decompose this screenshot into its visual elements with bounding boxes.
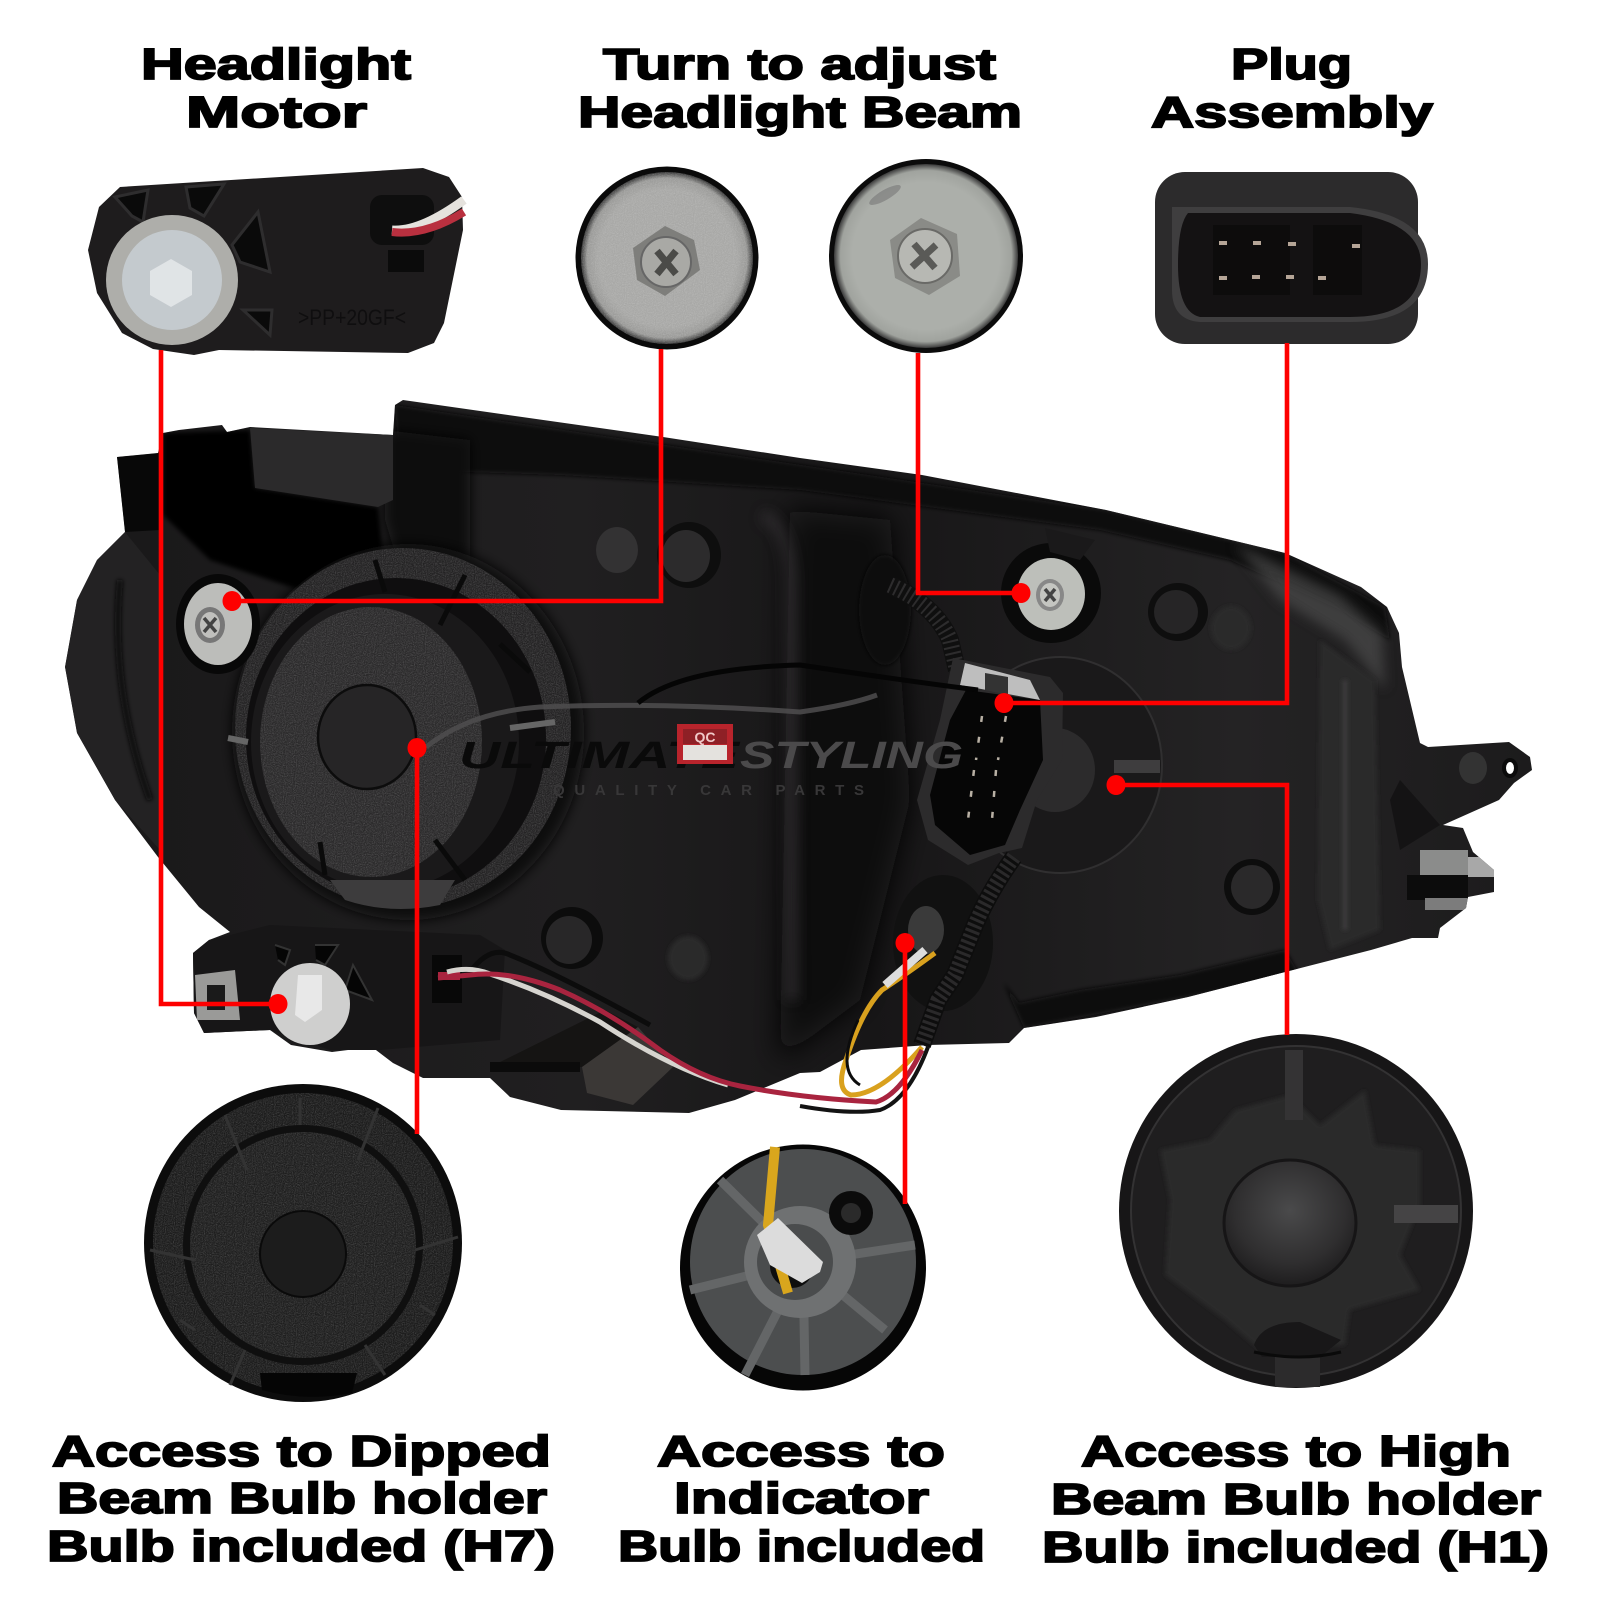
mounting hole	[1504, 760, 1516, 776]
connector line: headlight motor	[161, 350, 288, 1014]
heading: Turn to adjust Headlight Beam: Headlight Beam	[578, 88, 1022, 137]
connector line: high beam	[1106, 775, 1287, 1035]
inset: adjust screw 2	[829, 159, 1023, 353]
flange	[250, 428, 393, 507]
plug pins	[1213, 225, 1362, 295]
connector line: adjust screw right	[918, 353, 1030, 603]
braided wire	[922, 857, 1014, 1045]
heading: Plug Assembly	[1151, 40, 1434, 137]
inset: indicator bulb holder	[680, 1144, 926, 1390]
inset: dipped beam cap	[144, 1084, 462, 1402]
caption: high beam: Beam Bulb holder	[1051, 1475, 1541, 1524]
QC label	[677, 724, 733, 764]
body highlights	[1234, 543, 1385, 690]
heading: Turn to adjust Headlight Beam: Turn to adjust	[603, 40, 996, 89]
heading: Plug Assembly: Assembly	[1151, 88, 1434, 137]
headlight unit	[65, 400, 1532, 1113]
high beam cap on lamp	[958, 657, 1162, 873]
caption: indicator	[618, 1427, 985, 1571]
caption: dipped beam: Beam Bulb holder	[57, 1474, 547, 1523]
connector line: indicator	[896, 933, 914, 1204]
watermark: Ultimate Styling logo: ULTIMATE	[459, 735, 741, 777]
caption: dipped beam: Bulb included (H7)	[47, 1522, 555, 1571]
upper left tab	[117, 453, 160, 532]
lower flange	[1004, 950, 1300, 1028]
adjuster screw right	[1001, 528, 1101, 643]
caption: high beam	[1042, 1427, 1549, 1572]
connector line: plug assembly	[994, 343, 1287, 713]
inset: plug assembly	[1155, 172, 1428, 344]
bumper flap	[490, 1010, 673, 1105]
caption: high beam: Access to High	[1081, 1427, 1511, 1476]
caption: dipped beam: Access to Dipped	[52, 1427, 551, 1476]
motor rib windows	[115, 184, 272, 335]
indicator wire	[757, 1147, 823, 1293]
heading: Plug Assembly: Plug	[1231, 40, 1352, 89]
inset: adjust screw 1	[576, 166, 758, 350]
inset: headlight motor	[88, 168, 464, 355]
connector line: adjust screw left	[222, 349, 661, 611]
right fixture	[1420, 850, 1468, 875]
QC label: QC	[694, 729, 716, 745]
caption: dipped beam	[47, 1427, 555, 1571]
watermark: Ultimate Styling logo: QUALITY CAR PARTS	[553, 782, 864, 799]
caption: indicator: Access to	[657, 1427, 945, 1476]
adjuster screw left	[176, 574, 260, 674]
corrugated wire	[859, 555, 957, 670]
motor connector	[370, 195, 464, 272]
body plugs and grommets	[541, 522, 1280, 980]
watermark: Ultimate Styling logo	[426, 665, 978, 799]
motor on lamp	[193, 925, 505, 1050]
left recess	[163, 430, 385, 590]
caption: high beam: Bulb included (H1)	[1042, 1523, 1549, 1572]
caption: indicator: Bulb included	[618, 1522, 985, 1571]
top dark band	[395, 405, 1390, 640]
dipped beam cap on lamp	[228, 544, 584, 920]
indicator bulb holder hole	[893, 875, 993, 1011]
inset: headlight motor: >PP+20GF<	[298, 305, 406, 330]
heading: Headlight Motor: Headlight	[141, 40, 411, 89]
connector line: dipped beam	[408, 738, 426, 1134]
heading: Headlight Motor	[141, 40, 411, 137]
watermark: Ultimate Styling logo: STYLING	[740, 735, 963, 777]
motor gear disc	[106, 215, 238, 345]
heading: Headlight Motor: Motor	[186, 88, 367, 137]
heading: Turn to adjust Headlight Beam	[578, 40, 1022, 137]
caption: indicator: Indicator	[674, 1474, 929, 1523]
loose wires	[438, 950, 935, 1112]
wiring plug on lamp	[917, 658, 1063, 865]
mount hole	[1459, 752, 1487, 784]
left lip	[65, 532, 160, 850]
inset: high beam cap	[1119, 1034, 1473, 1388]
